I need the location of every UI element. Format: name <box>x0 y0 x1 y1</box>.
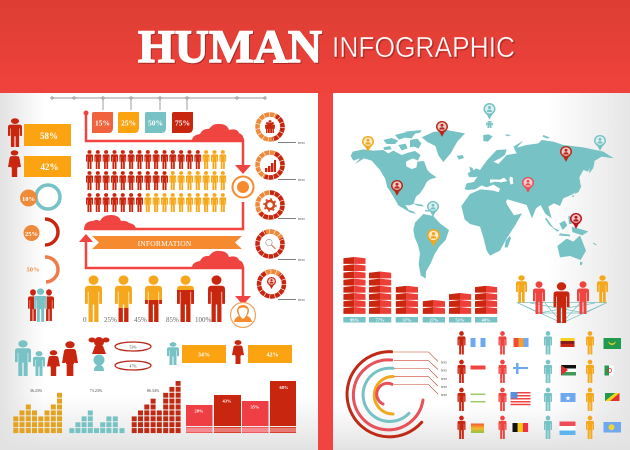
flow arrows and clouds <box>79 110 251 305</box>
stat: girl 42%: 42% <box>266 352 278 358</box>
ring labels <box>278 140 305 302</box>
flag: Belgium <box>512 423 528 432</box>
column 99% <box>343 257 366 314</box>
icon ring: people <box>253 110 287 144</box>
figure 85% <box>177 275 194 322</box>
flag: Congo <box>605 393 620 401</box>
block chart: orange: 36.23% <box>30 388 43 393</box>
percentage labels: 27% <box>430 318 439 322</box>
Arctic islands <box>383 130 422 150</box>
banner: information <box>92 236 242 249</box>
Madagascar <box>505 236 511 248</box>
radial chart labels: text <box>441 377 448 381</box>
Iceland <box>457 155 464 160</box>
percentage labels: 51% <box>456 318 465 322</box>
Arctic bits <box>505 134 550 149</box>
banner: information: INFORMATION <box>138 239 192 248</box>
bar 35%: 35% <box>250 404 260 410</box>
South America <box>413 214 449 279</box>
column 48% <box>475 286 497 314</box>
header band <box>0 0 630 93</box>
pin: east Russia <box>594 135 606 151</box>
figure 25% <box>115 275 132 322</box>
flag: Mongolia <box>514 338 528 347</box>
stat: female 42% <box>8 150 71 177</box>
stat: girl 42% <box>232 340 292 364</box>
stat: male 58% <box>8 118 71 147</box>
ellipse: 47%: 47% <box>129 364 137 368</box>
block chart: red <box>132 381 181 434</box>
ellipse: 53% <box>115 342 151 351</box>
donut: 10%: 10% <box>22 196 35 203</box>
people chart: row 3 <box>86 193 226 212</box>
panel: left <box>0 93 318 450</box>
stat: boy 34% <box>167 342 226 365</box>
ring labels: text <box>298 257 305 262</box>
Small Pacific islands <box>580 243 597 265</box>
radial chart <box>347 352 423 437</box>
bar 68%: 68% <box>280 385 289 390</box>
progress labels: 25% <box>104 316 117 324</box>
flag: Algeria <box>604 366 614 376</box>
people column: dark red <box>458 331 466 439</box>
tag 25%: 25% <box>121 118 136 128</box>
target circle <box>232 176 254 198</box>
stat: boy 34%: 34% <box>198 352 210 358</box>
block chart: red: 86.34% <box>147 388 160 393</box>
donut: 50% <box>26 257 58 282</box>
ring labels: text <box>298 140 305 145</box>
column 77% <box>369 272 391 314</box>
Kamchatka and Japan <box>572 161 595 198</box>
block chart: teal <box>69 388 124 434</box>
block chart: teal: 73.23% <box>90 388 103 393</box>
tag 15%: 15% <box>95 118 110 128</box>
people network <box>516 275 608 323</box>
block chart: orange <box>13 388 62 434</box>
percentage labels <box>343 317 497 322</box>
icon ring: growth <box>254 149 286 181</box>
percentage labels: 37% <box>402 318 412 322</box>
pin: Siberia <box>560 146 572 162</box>
bar chart <box>186 381 296 433</box>
radial chart labels: text <box>441 368 448 372</box>
people column: orange <box>586 331 594 439</box>
UK and Ireland <box>468 134 493 177</box>
family group <box>15 340 78 376</box>
progress labels <box>83 316 212 324</box>
flag: Somalia <box>560 393 576 402</box>
progress labels: 45% <box>134 316 147 324</box>
flag: Somalia: ★ <box>565 394 571 402</box>
icon: girl <box>88 337 110 354</box>
flag: Mauritania <box>604 338 621 349</box>
panel: right <box>333 93 630 450</box>
ring labels: text <box>298 297 305 302</box>
column 51% <box>449 293 471 314</box>
title: HUMAN: HUMAN <box>138 21 322 73</box>
radial chart labels <box>394 352 448 397</box>
tag 50%: 50% <box>148 118 163 128</box>
percentage labels: 77% <box>376 318 385 322</box>
stat: female 42%: 42% <box>40 162 58 172</box>
flag: blue white blue <box>470 338 486 347</box>
pin: Greenland <box>436 121 448 137</box>
flag: Liberia <box>510 392 530 405</box>
progress labels: 85% <box>166 316 179 324</box>
donut: 10% <box>20 185 60 209</box>
stacked bar chart <box>343 257 497 322</box>
bar 28%: 28% <box>194 408 204 414</box>
icon: boy <box>94 354 104 371</box>
title: INFOGRAPHIC: INFOGRAPHIC <box>332 32 515 64</box>
pin: person at north pole <box>486 121 493 128</box>
people column: teal <box>544 331 552 439</box>
ellipse: 47% <box>115 361 151 370</box>
pin: Central Asia <box>522 177 534 193</box>
figure 100% <box>208 275 225 322</box>
donut: 25%: 25% <box>25 231 38 238</box>
radial chart labels: text <box>441 360 448 364</box>
flag: Jordan <box>561 365 576 376</box>
North America <box>351 149 437 214</box>
icon: group <box>28 288 54 322</box>
people column: salmon <box>498 331 506 439</box>
ring labels: text <box>298 177 305 182</box>
ring labels: text <box>298 216 305 221</box>
tag 75%: 75% <box>175 118 190 128</box>
flag: Palau <box>604 422 621 432</box>
Eurasia <box>465 140 614 218</box>
avatar circle <box>230 302 256 328</box>
progress figures <box>85 275 225 322</box>
pin: north pole <box>484 103 496 120</box>
flag: Venezuela <box>560 338 574 347</box>
flag: gradient stripes <box>471 424 484 433</box>
percentage tags <box>92 112 193 133</box>
donut: 25% <box>24 219 58 245</box>
flag: green lines <box>470 394 486 402</box>
Africa <box>461 189 522 256</box>
progress labels: 0 <box>83 316 87 324</box>
donut: 50%: 50% <box>26 266 40 274</box>
flag: red band <box>470 366 486 370</box>
ellipse: 53%: 53% <box>129 344 137 350</box>
icon ring: location <box>255 267 288 301</box>
figure 45% <box>145 275 162 322</box>
Inland sea (white) <box>490 177 513 185</box>
Southeast Asia islands <box>545 216 588 236</box>
Hudson Bay (white) <box>406 158 418 169</box>
column 37% <box>396 286 418 314</box>
Central islands <box>413 203 429 212</box>
flag: Luxembourg <box>560 422 576 435</box>
icon ring: gear <box>258 192 282 218</box>
map pins <box>362 103 606 247</box>
radial chart labels: text <box>441 393 448 397</box>
progress labels: 100% <box>195 316 212 324</box>
pin: USA <box>391 180 403 196</box>
people chart: row 2 <box>86 171 226 190</box>
stat: male 58%: 58% <box>40 131 58 141</box>
column 27% <box>423 300 445 314</box>
world map <box>351 130 614 279</box>
Greenland <box>422 130 465 162</box>
timeline <box>51 97 266 110</box>
pin: Brazil <box>427 229 440 247</box>
flag: Finland <box>513 363 528 374</box>
people chart: row 1 <box>86 150 226 169</box>
pin: Alaska <box>362 136 374 152</box>
icon ring: search <box>254 228 286 260</box>
bar 43%: 43% <box>222 398 232 404</box>
radial chart labels: text <box>441 385 448 389</box>
figure 0% <box>85 275 102 322</box>
pin: Caribbean <box>427 201 439 217</box>
percentage labels: 99% <box>350 318 360 322</box>
pin: Philippines <box>570 213 582 229</box>
Australia <box>557 235 586 260</box>
percentage labels: 48% <box>482 318 491 322</box>
